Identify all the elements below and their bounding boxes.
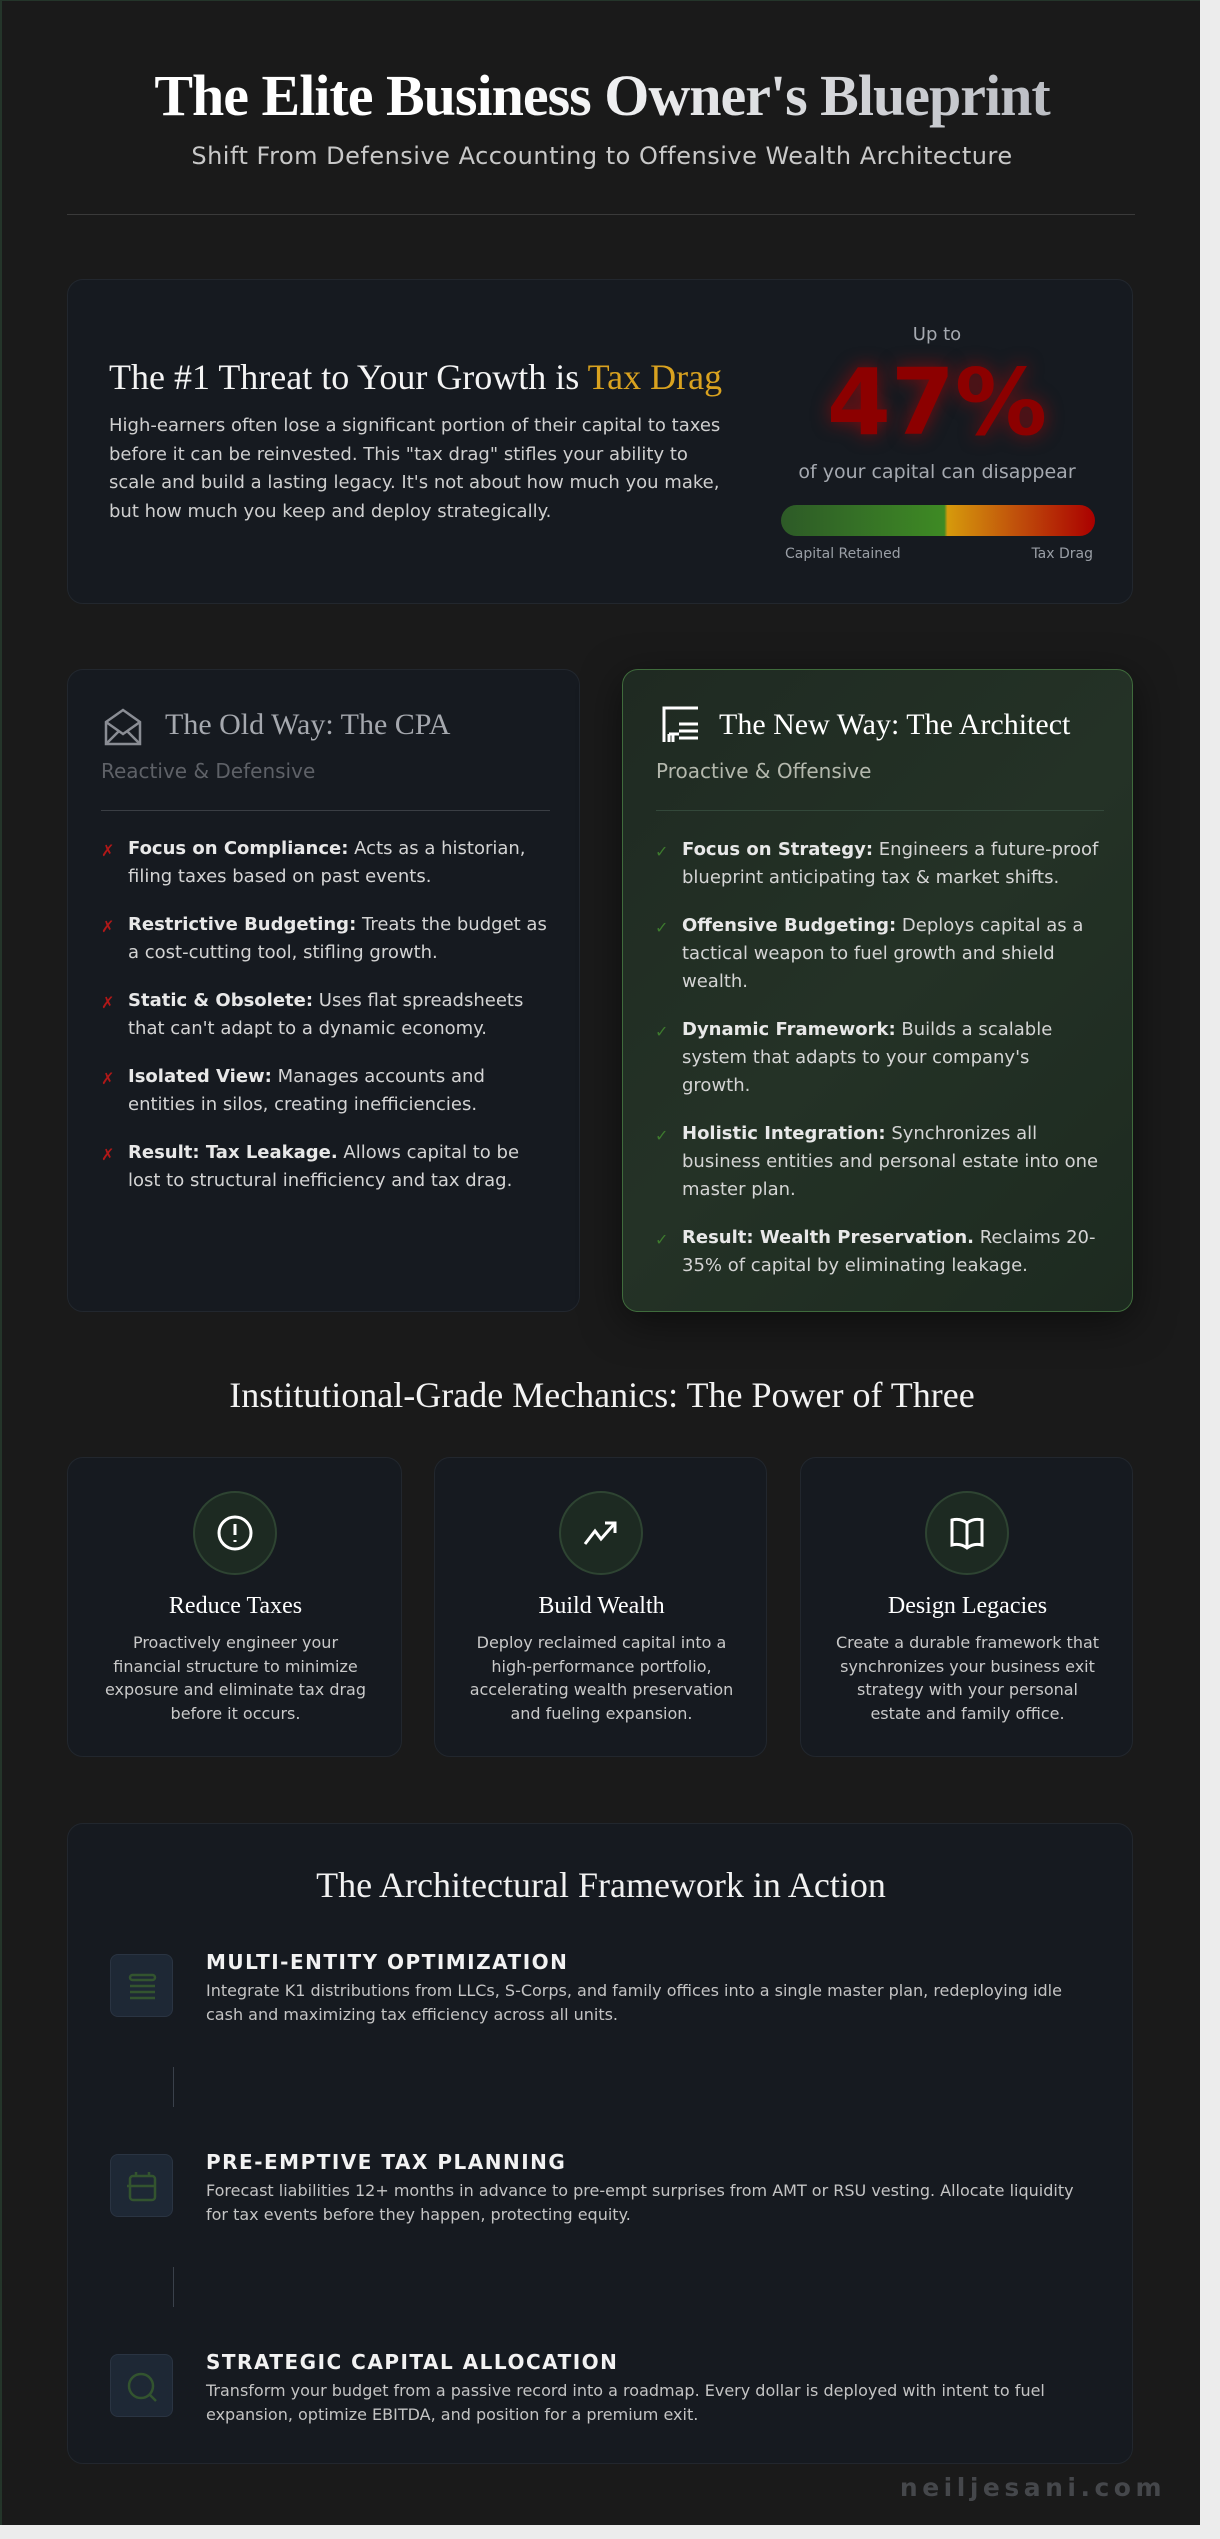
step: strategic capital allocation [110, 2350, 1045, 2424]
bar: capital retained vs tax drag [781, 505, 1095, 536]
legend labels: Tax Drag [1031, 546, 1093, 562]
description: Create a durable framework that synchronizes your business exit strategy with your personal estate and family office. [836, 1633, 1099, 1723]
panel: tax drag hero [67, 279, 1133, 604]
panel: old way: ✗ [101, 917, 114, 936]
icon: trending up [559, 1491, 643, 1575]
title: Design Legacies [888, 1593, 1047, 1619]
list: old way items: Static & Obsolete: Uses flat spreadsheets that can't adapt to a dynamic economy. [128, 990, 523, 1039]
title: The Elite Business Owner's Blueprint [154, 63, 1050, 128]
list: old way items: Result: Tax Leakage. Allows capital to be lost to structural inefficiency and tax drag. [128, 1142, 519, 1191]
text: tax drag explanation: High-earners often lose a significant portion of their capital to taxes before it can be reinvested. This "tax drag" stifles your ability to scale and build a lasting legacy. It's not about how much you make, but how much you keep and deploy strategically. [109, 415, 720, 522]
icon: alert circle [193, 1491, 277, 1575]
heading: The Architectural Framework in Action [316, 1865, 886, 1905]
icon: architect desk [662, 706, 698, 742]
subtitle: reactive: Reactive & Defensive [101, 759, 315, 783]
list: new way items [655, 839, 1099, 1276]
step: multi-entity: Integrate K1 distributions from LLCs, S-Corps, and family offices into a single master plan, redeploying idle cash and maximizing tax efficiency across all units. [206, 1981, 1062, 2024]
step: pre-emptive tax planning: PRE-EMPTIVE TAX PLANNING [206, 2150, 566, 2174]
card: reduce taxes [67, 1457, 402, 1757]
subtitle: proactive: Proactive & Offensive [656, 759, 871, 783]
icon: book [925, 1491, 1009, 1575]
step: pre-emptive tax planning: for tax events before they happen, protecting equity. [206, 2205, 631, 2224]
icon: list [110, 1954, 173, 2017]
panel: framework in action [67, 1823, 1133, 2464]
heading: power of three: Institutional-Grade Mechanics: The Power of Three [229, 1375, 975, 1415]
description: Proactively engineer your financial structure to minimize exposure and eliminate tax drag before it occurs. [105, 1633, 366, 1723]
legend labels [785, 546, 1093, 562]
heading: tax drag: The #1 Threat to Your Growth is Tax Drag [109, 357, 722, 397]
panel: old way: ✗ [101, 841, 114, 860]
list: new way items: Holistic Integration: Synchronizes all business entities and personal estate into one master plan. [682, 1123, 1098, 1200]
step: multi-entity [110, 1950, 1062, 2024]
title: Reduce Taxes [169, 1593, 302, 1619]
list: new way items: Result: Wealth Preservation. Reclaims 20-35% of capital by eliminating leakage. [682, 1227, 1095, 1276]
list: new way items: Focus on Strategy: Engineers a future-proof blueprint anticipating tax & market shifts. [682, 839, 1098, 888]
list: old way items [101, 838, 547, 1191]
heading: new way: The New Way: The Architect [719, 708, 1070, 741]
step: multi-entity: MULTI-ENTITY OPTIMIZATION [206, 1950, 568, 1974]
icon: search [110, 2354, 173, 2417]
icon: envelope [104, 708, 142, 746]
panel: new way: ✓ [655, 842, 668, 861]
panel: old way: ✗ [101, 993, 114, 1012]
panel: new way: ✓ [655, 918, 668, 937]
card: build wealth [434, 1457, 767, 1757]
stat: 47%: of your capital can disappear [798, 461, 1076, 483]
list: new way items: Dynamic Framework: Builds a scalable system that adapts to your company's growth. [682, 1019, 1052, 1096]
description: Deploy reclaimed capital into a high-performance portfolio, accelerating wealth preservation and fueling expansion. [470, 1633, 733, 1723]
list: new way items: Offensive Budgeting: Deploys capital as a tactical weapon to fuel growth and shield wealth. [682, 915, 1083, 992]
legend labels: Capital Retained [785, 546, 901, 562]
step: pre-emptive tax planning: Forecast liabilities 12+ months in advance to pre-empt surprises from AMT or RSU vesting. Allocate liquidity [206, 2181, 1074, 2200]
icon: calendar [110, 2154, 173, 2217]
list: old way items: Restrictive Budgeting: Treats the budget as a cost-cutting tool, stifling growth. [128, 914, 547, 963]
step: strategic capital allocation: Transform your budget from a passive record into a roadmap. Every dollar is deployed with intent to fuel expansion, optimize EBITDA, and position for a premium exit. [206, 2381, 1045, 2424]
list: old way items: Focus on Compliance: Acts as a historian, filing taxes based on past events. [128, 838, 526, 887]
panel: new way: ✓ [655, 1022, 668, 1041]
step: strategic capital allocation: STRATEGIC CAPITAL ALLOCATION [206, 2350, 618, 2374]
panel: old way: ✗ [101, 1145, 114, 1164]
subtitle: Shift From Defensive Accounting to Offensive Wealth Architecture [191, 142, 1013, 170]
panel: new way: ✓ [655, 1230, 668, 1249]
footer: website: neiljesani.com [900, 2473, 1166, 2502]
stat: 47%: Up to [913, 324, 961, 345]
panel: old way [67, 669, 580, 1312]
step: pre-emptive tax planning [110, 2150, 1074, 2224]
stat: 47% [798, 324, 1076, 483]
stat: 47%: 47% [827, 349, 1047, 456]
card: design legacies [800, 1457, 1133, 1757]
list: old way items: Isolated View: Manages accounts and entities in silos, creating inefficiencies. [128, 1066, 485, 1115]
title: Build Wealth [538, 1593, 665, 1619]
title [2, 61, 1202, 131]
panel: new way: ✓ [655, 1126, 668, 1145]
panel: old way: ✗ [101, 1069, 114, 1088]
heading: old way: The Old Way: The CPA [165, 708, 450, 741]
panel: new way [622, 669, 1133, 1312]
